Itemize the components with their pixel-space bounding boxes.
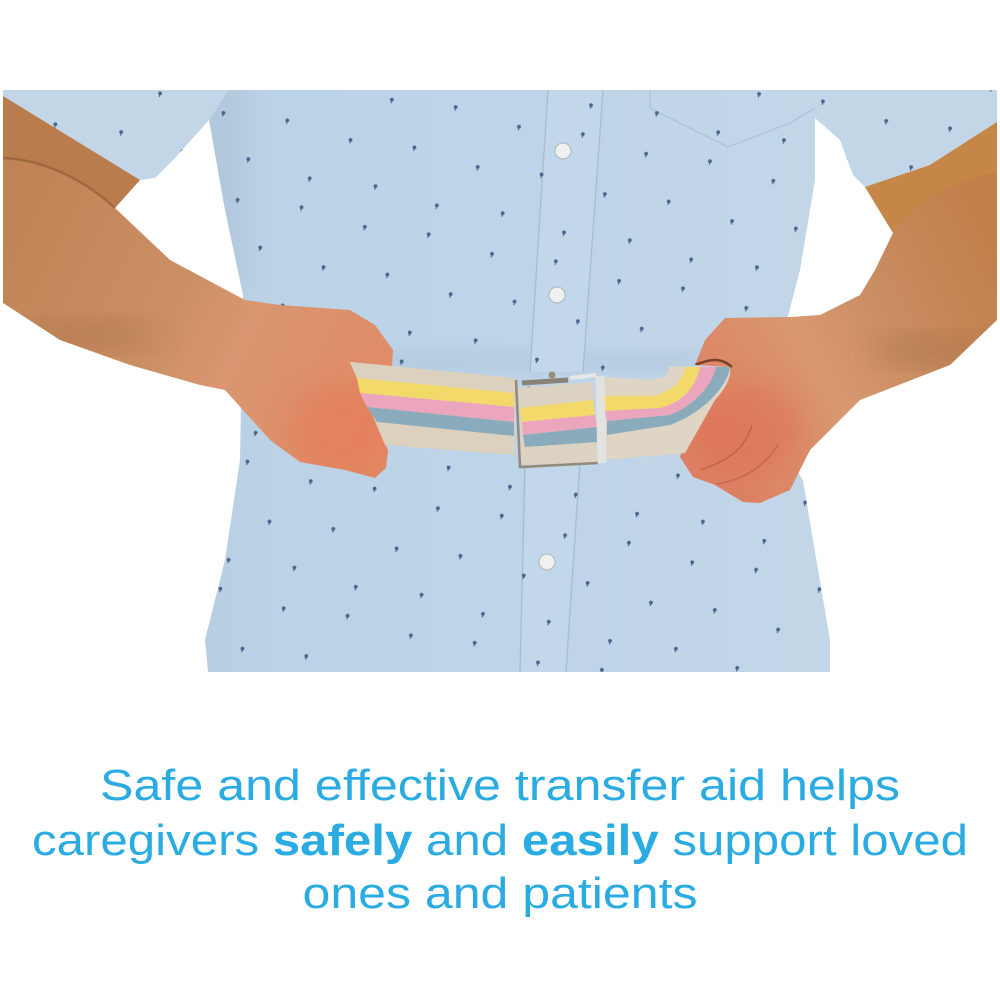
shirt button 1 [555,143,571,159]
right arm and hand [680,122,997,503]
belt strap under buckle [518,382,598,465]
caption line 2: caregivers safely and easily support loved [32,816,968,865]
belt webbing right [605,366,730,460]
gait belt [350,362,730,467]
shirt [200,85,840,675]
right sleeve [815,90,997,187]
right stripes [605,367,730,435]
belt webbing left [350,362,515,455]
left sleeve [3,90,228,180]
photo: man wearing transfer belt [3,85,997,675]
caption text [32,761,968,918]
left arm and hand [3,96,393,478]
shirt button 2 [549,287,565,303]
left stripes [357,378,514,436]
metal buckle [516,372,602,467]
belt tail [766,485,786,521]
shirt button 3 [539,554,555,570]
caption line 1: Safe and effective transfer aid helps [100,761,900,810]
caption line 3: ones and patients [302,869,698,918]
